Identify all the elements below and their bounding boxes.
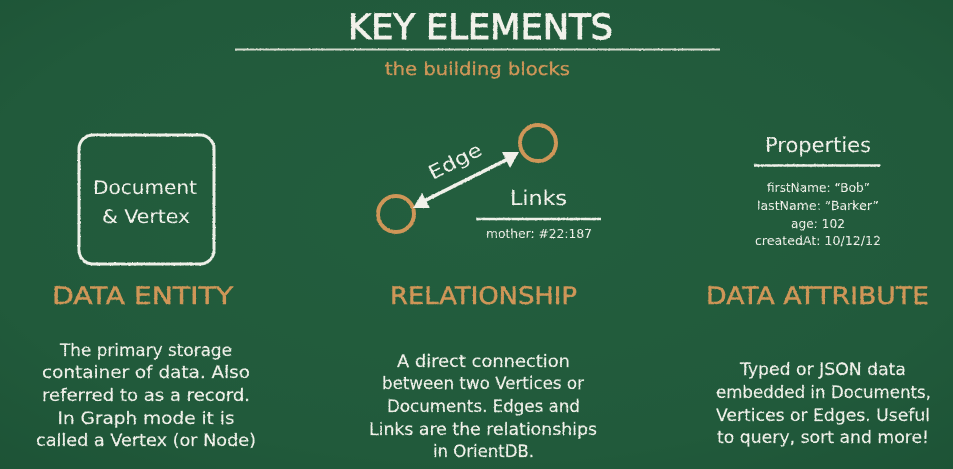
icon: edge between two vertices: Edge (425, 139, 486, 184)
text block: data attribute description (716, 360, 931, 447)
icon: edge between two vertices (378, 125, 556, 232)
text block: relationship description: between two Vertices or (382, 374, 584, 393)
heading: relationship: RELATIONSHIP (390, 282, 577, 310)
properties list: createdAt: 10/12/12 (755, 233, 881, 248)
subtitle: the building blocks (385, 60, 570, 80)
text block: relationship description: Links are the relationships (369, 420, 597, 439)
properties list: age: 102 (791, 216, 845, 231)
text block: data entity description: called a Vertex (or Node) (36, 431, 256, 450)
properties list: firstName: “Bob” (767, 180, 870, 195)
heading: data attribute: DATA ATTRIBUTE (706, 282, 929, 310)
panel: relationship (369, 125, 601, 461)
heading: data entity: DATA ENTITY (52, 282, 233, 310)
links label: Links (510, 186, 567, 210)
text block: relationship description: in OrientDB. (433, 442, 534, 461)
icon: document and vertex box: & Vertex (102, 206, 190, 228)
text block: data entity description: referred to as a record. (42, 386, 250, 405)
text block: relationship description: Documents. Edges and (387, 397, 580, 416)
text block: relationship description: A direct connection (397, 352, 570, 371)
icon: document and vertex box (79, 135, 214, 264)
text block: data entity description: In Graph mode it is (58, 409, 234, 428)
text block: data entity description: The primary storage (59, 341, 232, 360)
text block: data attribute description: Typed or JSON data (739, 360, 906, 379)
properties list: lastName: “Barker” (757, 198, 879, 213)
properties list (754, 133, 881, 248)
panel: data attribute (706, 133, 931, 447)
properties list: Properties (765, 133, 871, 157)
icon: document and vertex box: Document (93, 177, 197, 199)
text block: relationship description (369, 352, 597, 461)
text block: data attribute description: to query, sort and more! (717, 428, 929, 447)
text block: data entity description: container of data. Also (42, 363, 250, 382)
text block: data attribute description: Vertices or Edges. Useful (716, 406, 930, 425)
panel: data entity (36, 135, 256, 450)
text block: data attribute description: embedded in Documents, (716, 383, 931, 402)
text block: data entity description (36, 341, 256, 450)
links label (476, 186, 601, 241)
links label: mother: #22:187 (486, 226, 592, 241)
title: KEY ELEMENTS (348, 8, 613, 48)
